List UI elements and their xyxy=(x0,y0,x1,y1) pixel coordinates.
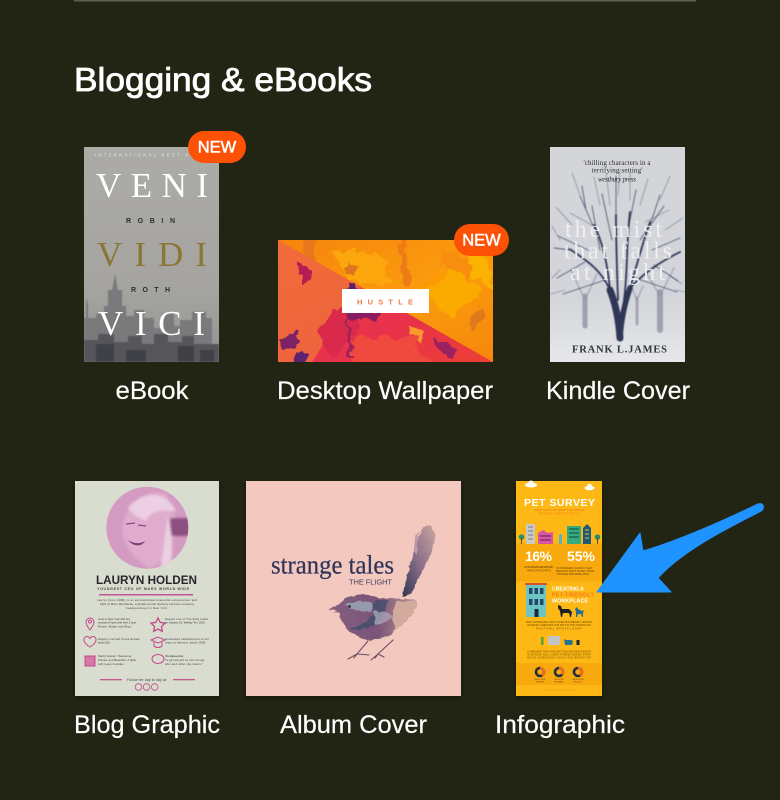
album title: strange tales xyxy=(271,550,394,580)
book title xyxy=(564,217,672,286)
heading: Blogging & eBooks xyxy=(74,61,372,98)
infographic thumbnail: HAVE OFFICE PETS xyxy=(527,570,551,572)
follow footer: Follow her day to day at: xyxy=(127,678,167,682)
top strapline: INTERNATIONAL BEST SELLER xyxy=(95,152,214,158)
facts text: on October 23, Weekly Ten, 2010 xyxy=(165,620,205,624)
infographic thumbnail: BOOSTS xyxy=(554,679,564,681)
title words: VENI xyxy=(96,166,208,205)
book title: the mist xyxy=(565,217,662,243)
survey title: PET SURVEY xyxy=(524,497,595,509)
infographic thumbnail: WHILE INCREASING FOCUS AND RETENTION xyxy=(527,656,591,660)
facts text: husband Frank with their 2 kids xyxy=(98,620,137,624)
quote: 'chilling characters in a xyxy=(584,159,651,167)
card: Infographic xyxy=(495,480,625,739)
label: Desktop Wallpaper xyxy=(277,377,493,405)
intro paragraph: headquartered in New York. xyxy=(126,606,168,610)
infographic thumbnail xyxy=(516,480,602,696)
infographic thumbnail: REDUCES xyxy=(535,679,546,681)
fact icons xyxy=(84,618,165,666)
supplies row xyxy=(541,636,580,645)
title words xyxy=(96,166,208,343)
infographic thumbnail: IN MORALE AND LOWER STRESS AMONG STAFF xyxy=(527,654,592,656)
title words: VICI xyxy=(98,304,205,343)
workplace heading: WORKPLACE xyxy=(552,598,588,604)
infographic thumbnail: POSITIVELY AFFECTS STAFF xyxy=(536,628,583,630)
album art: THE FLIGHT xyxy=(349,578,392,586)
album art xyxy=(246,481,461,696)
infographic thumbnail: HIGHLIGHTS OF WHAT THE WORLD xyxy=(534,508,584,512)
infographic thumbnail: MORALE xyxy=(554,680,564,684)
card: Blog Graphic xyxy=(74,481,220,739)
facts text: since 2011 xyxy=(98,640,110,644)
infographic thumbnail: MANY BUSINESSES WANT TO BE PET FRIENDLY OFFICES xyxy=(526,621,592,624)
book title: at night xyxy=(570,260,665,286)
follow footer xyxy=(100,678,195,690)
title words: VIDI xyxy=(97,235,207,274)
facts text: Lives in New York with her xyxy=(98,617,130,621)
buildings xyxy=(519,524,600,544)
name: LAURYN HOLDEN xyxy=(96,575,197,587)
label: eBook xyxy=(116,377,189,405)
portrait xyxy=(106,486,190,570)
infographic thumbnail: IMPROVES xyxy=(572,679,584,681)
blog graphic poster xyxy=(75,481,219,696)
hustle box xyxy=(342,289,429,313)
facts text: "A girl should be two things: xyxy=(165,658,205,662)
badge: new: NEW xyxy=(198,138,237,156)
facts text: Vanity Glossy: "Awesome, xyxy=(98,654,132,658)
intro paragraph: CEO of Marx Worldwide, a global courier delivery services company xyxy=(100,602,195,606)
quote: terrifying setting' xyxy=(592,166,642,174)
facts text: She believes that xyxy=(165,654,183,658)
infographic thumbnail: BRINGING PETS MAKES THEM xyxy=(556,570,594,573)
author names xyxy=(126,218,175,294)
infographic thumbnail: OFFERING AMENITIES FOR PETS IN THE WORKPLACE xyxy=(527,624,591,627)
quote xyxy=(584,159,651,184)
wallpaper image xyxy=(278,236,493,366)
badge: new: NEW xyxy=(462,232,501,250)
card: Desktop Wallpaper xyxy=(277,224,509,405)
ebook cover xyxy=(84,147,219,378)
facts text: class at Harvard, batch 2008 xyxy=(165,640,205,644)
author: FRANK L.JAMES xyxy=(572,344,667,356)
infographic thumbnail: SOURCES AND REFERENCES xyxy=(543,689,575,692)
label: Album Cover xyxy=(280,711,427,739)
author names: ROBIN xyxy=(126,218,175,225)
card: Album Cover xyxy=(246,481,461,739)
blog graphic poster: YOUNGEST CEO OF MARX WORLD WIDE xyxy=(97,587,190,591)
facts text: Poised, and Beautiful: A Q&A xyxy=(98,658,136,662)
facts text: Named one of The Ring Index xyxy=(165,617,209,621)
bird illustration xyxy=(329,526,435,640)
infographic thumbnail: HAPPIER AND MORE ABLE xyxy=(557,573,589,576)
infographic thumbnail: OF WORKERS REPORTEDLY xyxy=(524,566,554,569)
facts text: Happily married Frank Holden xyxy=(98,637,140,641)
label: Infographic xyxy=(495,711,625,739)
facts text: Renee, Walter and Rhys xyxy=(98,624,132,628)
facts text: Graduated Valedictorian of her xyxy=(165,637,209,641)
band xyxy=(516,544,602,582)
facts text: who and what she wants." xyxy=(165,662,203,666)
workplace section xyxy=(526,585,546,617)
intro paragraph: Lauryn (born 1980) is an accomplished ensemble entrepreneur and xyxy=(97,598,197,602)
kindle cover xyxy=(550,147,685,362)
workplace heading: CREATING A xyxy=(552,586,584,592)
workplace heading: PET-FRIENDLY xyxy=(552,592,594,598)
infographic thumbnail: COMPANIES THAT HAVE PET POLICIES SEE A BOOST xyxy=(527,650,592,654)
stats xyxy=(525,548,596,564)
intro paragraph xyxy=(97,598,197,610)
label: Blog Graphic xyxy=(74,711,220,739)
infographic thumbnail: STRESS xyxy=(536,682,545,684)
stats: 55% xyxy=(567,548,596,564)
dog and cat xyxy=(558,605,584,617)
city skyline xyxy=(84,274,219,362)
badge: new xyxy=(188,131,246,163)
book title: that falls xyxy=(564,238,672,264)
bird legs xyxy=(348,640,393,660)
card: eBook xyxy=(84,131,246,405)
card: Kindle Cover xyxy=(546,147,690,405)
main tree xyxy=(551,169,685,338)
author names: ROTH xyxy=(131,287,170,294)
donut band xyxy=(516,663,602,685)
background trees xyxy=(571,268,674,330)
quote: westbury press xyxy=(598,176,636,184)
infographic thumbnail: OF WORKERS SURVEY SAID xyxy=(556,567,592,570)
hustle box: HUSTLE xyxy=(357,298,413,306)
clouds xyxy=(525,480,594,490)
donut charts xyxy=(536,668,582,676)
facts text: with Lauryn Holden xyxy=(98,662,124,666)
label: Kindle Cover xyxy=(546,377,690,405)
arrow: blue pointer to infographic xyxy=(597,504,763,592)
facts text xyxy=(98,617,209,666)
infographic thumbnail: FOCUS xyxy=(574,682,582,684)
infographic thumbnail: THINKS ABOUT PETS xyxy=(539,512,579,516)
stats: 16% xyxy=(525,548,553,564)
badge: new xyxy=(454,224,509,256)
workplace heading xyxy=(552,586,594,604)
